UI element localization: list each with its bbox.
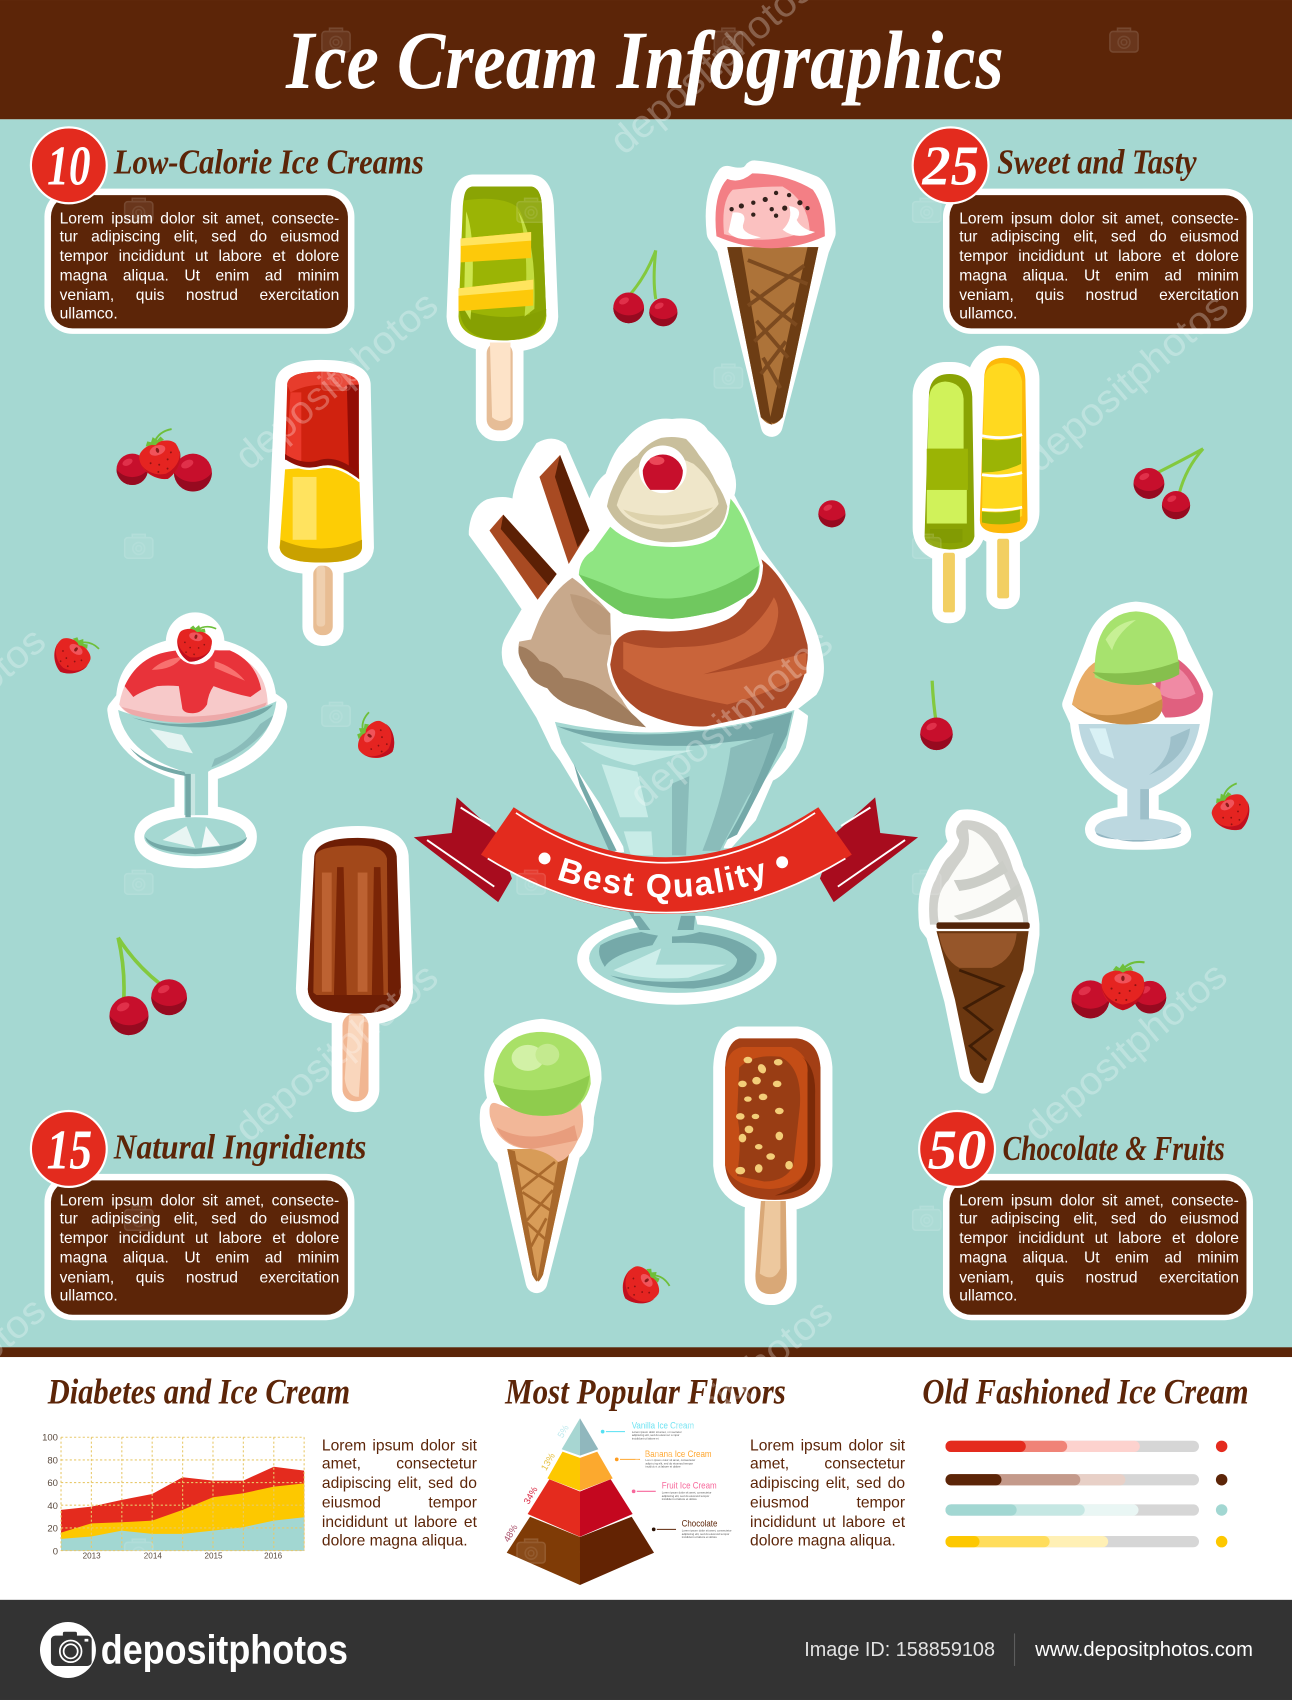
teal background xyxy=(0,119,1292,1348)
text block: veniam, quis nostrud exercitation xyxy=(959,1269,1239,1286)
icon: single cherry xyxy=(920,681,953,750)
text block: tempor incididunt ut labore et dolore xyxy=(60,248,339,266)
footer site url: www.depositphotos.com xyxy=(1034,1638,1253,1661)
text block xyxy=(60,1192,339,1309)
yellow bar xyxy=(980,358,1028,533)
ribbon text: Best Quality xyxy=(558,858,764,904)
text block: ullamco. xyxy=(60,1288,118,1305)
header band xyxy=(0,0,1292,119)
icon: cherry pair top xyxy=(613,250,677,326)
footer logo text: depositphotos xyxy=(101,1626,348,1672)
title: Ice Cream Infographics xyxy=(285,15,1004,106)
badge: 50 xyxy=(918,1110,996,1188)
beige scoop xyxy=(518,578,646,727)
icon: strawberry right xyxy=(1204,783,1258,839)
glass bowl xyxy=(555,710,794,916)
x axis labels: 2016 xyxy=(264,1552,283,1561)
badge: 15: 15 xyxy=(47,1119,92,1181)
icon: twin popsicles xyxy=(925,358,1028,612)
icon: pink ice cream cone xyxy=(715,171,825,426)
pyramid tier: banana xyxy=(547,1452,613,1491)
text block: flavors xyxy=(750,1437,905,1554)
footer image id: Image ID: 158859108 xyxy=(804,1639,995,1661)
glass base xyxy=(589,923,765,993)
y axis labels: 40 xyxy=(47,1501,58,1512)
icon: central sundae xyxy=(470,420,822,1005)
whipped cream xyxy=(607,437,727,542)
badge: 10 xyxy=(30,126,108,204)
bar: teal xyxy=(945,1504,1227,1516)
x axis labels: 2015 xyxy=(205,1552,223,1561)
text block: tur adipiscing elit, sed do eiusmod xyxy=(959,1211,1239,1228)
pyramid percentages: 48% xyxy=(502,1523,520,1544)
icon: nut covered chocolate popsicle xyxy=(725,1038,821,1294)
bar: brown xyxy=(945,1474,1227,1485)
text block: Lorem ipsum dolor sit amet, consecte- xyxy=(959,1192,1239,1209)
legend: chocolate: Lorem ipsum dolor sit amet, consectetur xyxy=(682,1529,732,1533)
text block: veniam, quis nostrud exercitation xyxy=(60,287,339,304)
x axis labels xyxy=(83,1552,283,1561)
icon: berries and cherries right xyxy=(1071,962,1166,1018)
legend: vanilla xyxy=(601,1421,694,1440)
legend: chocolate xyxy=(652,1519,732,1539)
y axis labels: 60 xyxy=(47,1478,58,1489)
red area xyxy=(61,1467,304,1551)
footer bar xyxy=(0,1600,1292,1700)
heading: most popular flavors: Most Popular Flavors xyxy=(504,1372,786,1412)
icon: soft serve cone xyxy=(929,820,1030,1083)
icon: green and peach ice cream cone xyxy=(489,1030,591,1282)
text block: magna aliqua. Ut enim ad minim xyxy=(959,1249,1239,1267)
panel: sweet and tasty xyxy=(912,126,1253,334)
green scoop xyxy=(579,499,760,619)
badge: 50: 50 xyxy=(928,1119,986,1181)
pyramid tier: fruit xyxy=(528,1479,633,1537)
text block xyxy=(60,210,339,327)
badge: 25: 25 xyxy=(921,135,979,197)
brown scoop xyxy=(610,558,808,726)
wafer sticks xyxy=(489,515,557,600)
text block: diabetes: adipiscing elit, sed do xyxy=(322,1475,477,1493)
legend: vanilla: incididunt ut labore et xyxy=(632,1436,659,1440)
legend: fruit: Lorem ipsum dolor sit amet, consectetur xyxy=(662,1491,712,1495)
text block: tempor incididunt ut labore et dolore xyxy=(959,1230,1239,1248)
pyramid percentages xyxy=(502,1423,571,1544)
icon: strawberry left xyxy=(45,627,99,682)
legend: banana: adipiscing elit, sed do eiusmod tempor xyxy=(645,1461,693,1465)
text block: flavors: eiusmod tempor xyxy=(750,1494,905,1512)
icon: strawberry bottom xyxy=(613,1257,670,1313)
icon: cherry pair right xyxy=(1134,449,1203,519)
text block: ullamco. xyxy=(959,1288,1017,1305)
y axis labels: 20 xyxy=(47,1524,58,1535)
icon: small cherry dot xyxy=(818,500,845,527)
footer logo icon xyxy=(40,1622,96,1678)
text block: diabetes xyxy=(322,1437,477,1554)
ribbon: best quality xyxy=(414,797,918,914)
y axis labels: 0 xyxy=(53,1546,58,1557)
text block: flavors: adipiscing elit, sed do xyxy=(750,1475,905,1493)
progress bars xyxy=(945,1441,1227,1547)
legend: banana: Lorem ipsum dolor sit amet, consectetur xyxy=(645,1458,695,1462)
legend: chocolate: adipiscing elit, sed do eiusmod tempor xyxy=(682,1532,729,1536)
text block: flavors: amet, consectetur xyxy=(750,1456,905,1473)
icon: berries and cherries top left xyxy=(117,429,212,492)
text block: tempor incididunt ut labore et dolore xyxy=(60,1230,339,1248)
legend: banana: incididunt ut labore et dolore xyxy=(645,1465,681,1469)
panel: low-calorie ice creams xyxy=(30,126,424,334)
y axis labels: 100 xyxy=(42,1433,58,1444)
icon: green popsicle xyxy=(458,186,546,430)
text block: tur adipiscing elit, sed do eiusmod xyxy=(60,1211,339,1228)
heading: diabetes: Diabetes and Ice Cream xyxy=(47,1372,350,1412)
x axis labels: 2014 xyxy=(144,1552,162,1561)
text block: diabetes: dolore magna aliqua. xyxy=(322,1533,468,1550)
watermark overlay: depositphotos xyxy=(1017,285,1237,481)
text block: magna aliqua. Ut enim ad minim xyxy=(60,267,339,285)
icon: right sundae with three scoops xyxy=(1072,611,1203,842)
text block: flavors: Lorem ipsum dolor sit xyxy=(750,1437,905,1454)
panel: chocolate and fruits xyxy=(918,1110,1253,1320)
area chart xyxy=(42,1433,304,1561)
watermark overlay: depositphotos xyxy=(227,955,446,1150)
text block: ullamco. xyxy=(959,306,1017,323)
text block: flavors: incididunt ut labore et xyxy=(750,1514,905,1531)
heading: low-calorie: Low-Calorie Ice Creams xyxy=(113,142,424,181)
watermark overlay: depositphotos xyxy=(621,621,841,817)
legend: fruit: incididunt ut labore et dolore xyxy=(662,1497,697,1501)
cherry xyxy=(639,445,687,493)
legend: vanilla: Vanilla Ice Cream xyxy=(632,1421,694,1431)
text block: diabetes: amet, consectetur xyxy=(322,1456,477,1473)
pyramid tier: vanilla xyxy=(562,1418,598,1456)
watermark overlay: depositphotos xyxy=(227,283,446,478)
text block: veniam, quis nostrud exercitation xyxy=(60,1269,339,1286)
text block: diabetes: incididunt ut labore et xyxy=(322,1514,477,1531)
text block: diabetes: eiusmod tempor xyxy=(322,1494,477,1512)
legend: fruit: Fruit Ice Cream xyxy=(662,1481,717,1491)
ribbon band xyxy=(481,807,852,914)
legend: vanilla: adipiscing elit, sed do eiusmod tempor xyxy=(632,1433,680,1437)
heading: chocolate and fruits: Chocolate & Fruits xyxy=(1003,1129,1225,1168)
badge: 15 xyxy=(30,1110,108,1188)
text block: Lorem ipsum dolor sit amet, consecte- xyxy=(60,1192,339,1209)
watermark overlay: depositphotos xyxy=(621,1291,841,1486)
legend: banana xyxy=(615,1449,712,1469)
text block: ullamco. xyxy=(60,306,118,323)
legend: banana: Banana Ice Cream xyxy=(645,1449,712,1459)
text block xyxy=(959,1192,1239,1309)
pyramid percentages: 34% xyxy=(522,1485,540,1506)
x axis labels: 2013 xyxy=(83,1552,101,1561)
icon: sundae with strawberry xyxy=(117,612,277,858)
text block: magna aliqua. Ut enim ad minim xyxy=(959,267,1239,285)
icon: cherry pair bottom left xyxy=(109,938,187,1035)
text block: diabetes: Lorem ipsum dolor sit xyxy=(322,1437,477,1454)
white sticker outline xyxy=(470,420,822,851)
legend: chocolate: incididunt ut labore et dolore xyxy=(682,1535,717,1539)
heading: sweet and tasty: Sweet and Tasty xyxy=(997,142,1197,181)
panel: natural ingredients xyxy=(30,1110,366,1320)
yellow area xyxy=(61,1483,304,1551)
text block: Lorem ipsum dolor sit amet, consecte- xyxy=(60,210,339,227)
icon: strawberry middle left xyxy=(347,712,403,767)
text block: tempor incididunt ut labore et dolore xyxy=(959,248,1239,266)
text block: magna aliqua. Ut enim ad minim xyxy=(60,1249,339,1267)
legend: vanilla: Lorem ipsum dolor sit amet, consectetur xyxy=(632,1430,682,1434)
heading: natural ingridients: Natural Ingridients xyxy=(113,1128,366,1167)
legend: fruit xyxy=(632,1481,717,1501)
green bar xyxy=(925,374,974,550)
bar: yellow xyxy=(945,1536,1227,1547)
y axis labels xyxy=(42,1433,58,1557)
teal area xyxy=(61,1517,304,1551)
text block: veniam, quis nostrud exercitation xyxy=(959,287,1239,304)
text block xyxy=(959,210,1239,327)
legend: fruit: adipiscing elit, sed do eiusmod tempor xyxy=(662,1494,709,1498)
white lower panel xyxy=(0,1357,1292,1600)
badge: 10: 10 xyxy=(47,135,91,197)
legend: chocolate: Chocolate xyxy=(682,1519,717,1529)
bar: red xyxy=(945,1441,1227,1452)
text block: tur adipiscing elit, sed do eiusmod xyxy=(60,229,339,246)
text block: tur adipiscing elit, sed do eiusmod xyxy=(959,229,1239,246)
brown divider band xyxy=(0,1347,1292,1357)
pyramid tier: chocolate xyxy=(507,1517,654,1585)
watermark overlay: depositphotos xyxy=(1016,954,1235,1149)
ribbon tails xyxy=(414,797,512,902)
icon: red and yellow popsicle xyxy=(280,372,362,635)
text block: Lorem ipsum dolor sit amet, consecte- xyxy=(959,210,1239,227)
pyramid chart xyxy=(502,1418,732,1585)
icon: chocolate popsicle xyxy=(308,838,401,1101)
y axis labels: 80 xyxy=(47,1455,58,1466)
badge: 25 xyxy=(912,126,990,204)
text block: flavors: dolore magna aliqua. xyxy=(750,1533,896,1550)
pyramid percentages: 5% xyxy=(556,1423,571,1440)
pyramid percentages: 13% xyxy=(539,1451,557,1472)
